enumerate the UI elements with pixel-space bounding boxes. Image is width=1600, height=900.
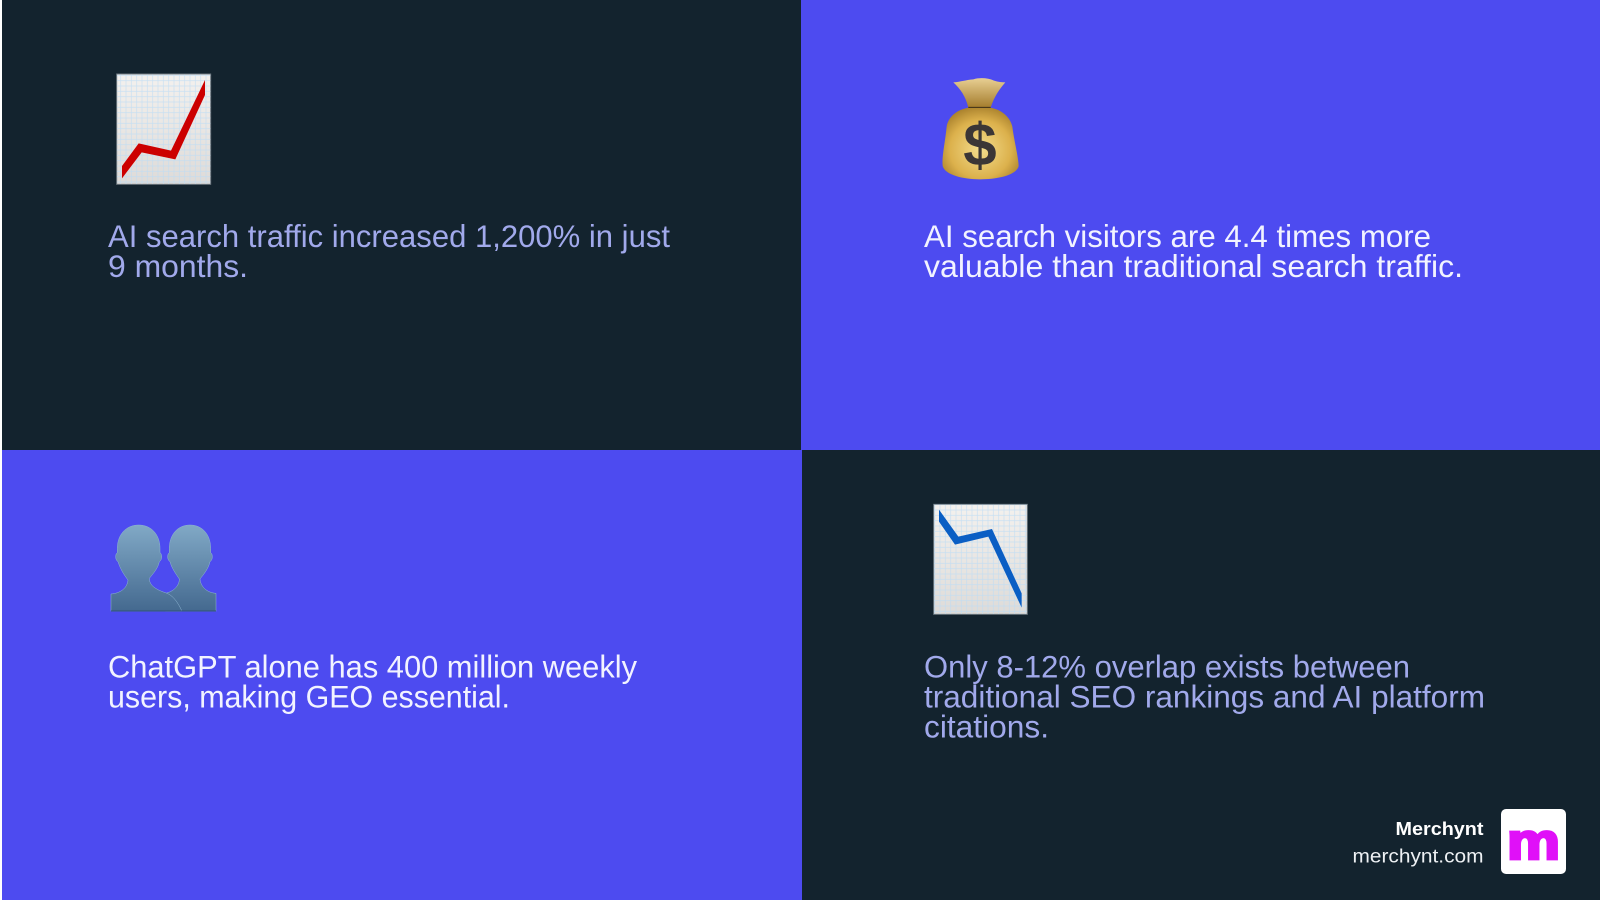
text: visitor value statistic: valuable than traditional search traffic.	[924, 248, 1463, 284]
logo: m	[1507, 813, 1560, 870]
panel: SEO overlap	[802, 450, 1600, 900]
text: overlap statistic: citations.	[924, 708, 1049, 744]
branding: Merchynt	[1352, 809, 1566, 874]
text: traffic growth statistic: 9 months.	[108, 248, 248, 284]
panel: visitor value	[801, 0, 1600, 450]
icon: two busts in silhouette	[111, 525, 216, 611]
logo	[1501, 809, 1566, 874]
brand URL: merchynt.com	[1352, 846, 1484, 868]
text: ChatGPT users statistic: ChatGPT alone has 400 million weekly	[108, 648, 637, 684]
icon: money bag: $	[963, 111, 997, 178]
text: overlap statistic: Only 8-12% overlap exists between	[924, 648, 1410, 684]
text: ChatGPT users statistic	[108, 648, 637, 714]
text: overlap statistic	[924, 648, 1485, 744]
text: ChatGPT users statistic: users, making GEO essential.	[108, 678, 510, 714]
icon: money bag	[942, 78, 1019, 179]
text: overlap statistic: traditional SEO rankings and AI platform	[924, 678, 1485, 714]
panel: traffic growth	[2, 0, 801, 450]
icon: chart decreasing	[934, 504, 1027, 614]
brand name: Merchynt	[1396, 818, 1484, 839]
text: visitor value statistic	[924, 218, 1463, 284]
text: traffic growth statistic: AI search traffic increased 1,200% in just	[108, 218, 670, 254]
icon: chart increasing	[117, 74, 211, 184]
text: traffic growth statistic	[108, 218, 670, 284]
panel: ChatGPT users	[2, 450, 802, 900]
text: visitor value statistic: AI search visitors are 4.4 times more	[924, 218, 1431, 254]
